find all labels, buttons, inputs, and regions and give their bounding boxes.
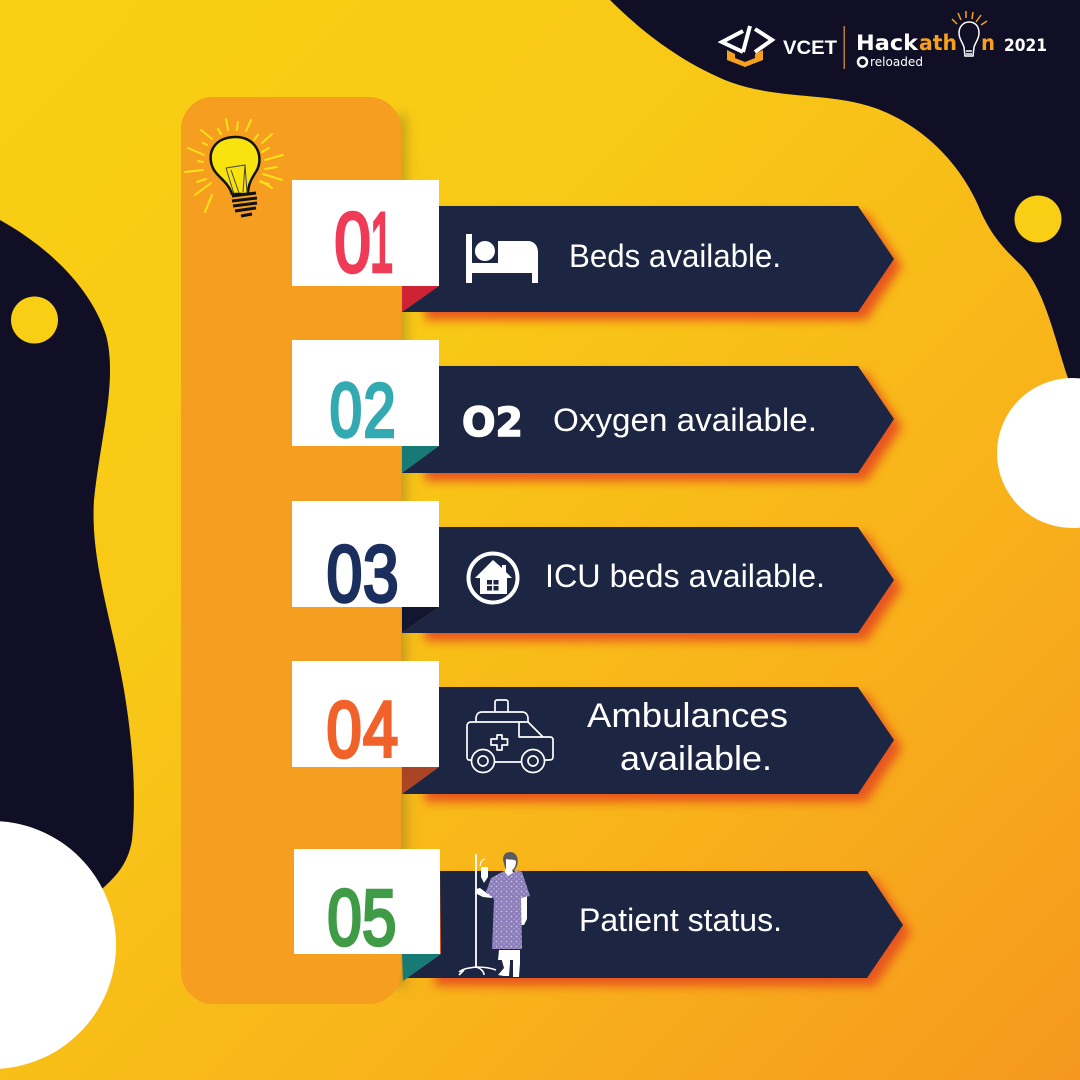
band 4: [402, 687, 894, 794]
yellow dot left: [11, 296, 58, 344]
number 01: 0: [334, 196, 371, 289]
number box 1: [292, 180, 439, 286]
band 5: [407, 871, 903, 978]
band 3: [402, 527, 894, 633]
label 1: Beds available.: [569, 238, 781, 274]
logo text VCET: VCET: [783, 38, 837, 59]
band shadow 4: [425, 694, 902, 802]
icon: bed: [466, 234, 538, 283]
logo divider: [844, 26, 845, 69]
white circle right: [997, 378, 1080, 528]
band shadow 3: [425, 534, 902, 641]
fold 5: [402, 951, 441, 981]
orange vertical panel: [181, 97, 401, 1004]
band shadow 1: [425, 213, 902, 320]
logo text 2021: 2021: [1004, 36, 1047, 56]
label 4: Ambulances: [587, 697, 788, 735]
panel shadow: [392, 116, 406, 986]
band shadow 5: [435, 878, 911, 986]
fold 3: [402, 607, 439, 633]
logo text Hack: Hack: [856, 31, 919, 55]
icon: O2: O2: [462, 400, 523, 446]
number 01: [334, 196, 393, 290]
icon: house in circle: [468, 554, 518, 602]
white circle bottom left: [0, 821, 116, 1069]
logo icon: mortarboard: [722, 26, 772, 67]
fold 1: [402, 286, 439, 312]
number 04: 04: [326, 686, 398, 774]
left dark blob: [0, 220, 134, 900]
number 02: 02: [330, 369, 396, 453]
label 2: Oxygen available.: [553, 402, 817, 438]
fold 2: [402, 446, 439, 473]
logo text ath: ath: [919, 31, 957, 55]
icon: light bulb: [185, 119, 283, 216]
label 5: Patient status.: [579, 902, 782, 938]
item 1: [292, 180, 902, 320]
illustration: patient with IV stand: [459, 852, 530, 977]
label 4: [587, 697, 788, 778]
yellow dot right: [1014, 196, 1062, 242]
label 3: ICU beds available.: [545, 558, 825, 594]
logo: VCET Hackathon 2021: [722, 11, 1047, 69]
band 2: [402, 366, 894, 473]
number 01: 1: [370, 197, 393, 290]
top right dark blob: [610, 0, 1080, 392]
item 3: [292, 501, 902, 641]
logo text reloaded: reloaded: [870, 54, 923, 69]
logo text n: n: [981, 31, 995, 55]
band 1: [402, 206, 894, 312]
logo bulb: [952, 11, 987, 56]
number 03: 03: [327, 529, 399, 619]
item 5: [294, 849, 911, 986]
number box 5: [294, 849, 440, 954]
icon: ambulance: [467, 700, 553, 772]
logo reloaded icon: [858, 58, 867, 66]
item 4: [292, 661, 902, 802]
number box 2: [292, 340, 439, 446]
item 2: [292, 340, 902, 481]
number 05: 05: [327, 874, 396, 962]
band shadow 2: [425, 373, 902, 481]
fold 4: [402, 767, 439, 794]
number box 4: [292, 661, 439, 767]
number box 3: [292, 501, 439, 607]
label 4: available.: [620, 740, 772, 778]
